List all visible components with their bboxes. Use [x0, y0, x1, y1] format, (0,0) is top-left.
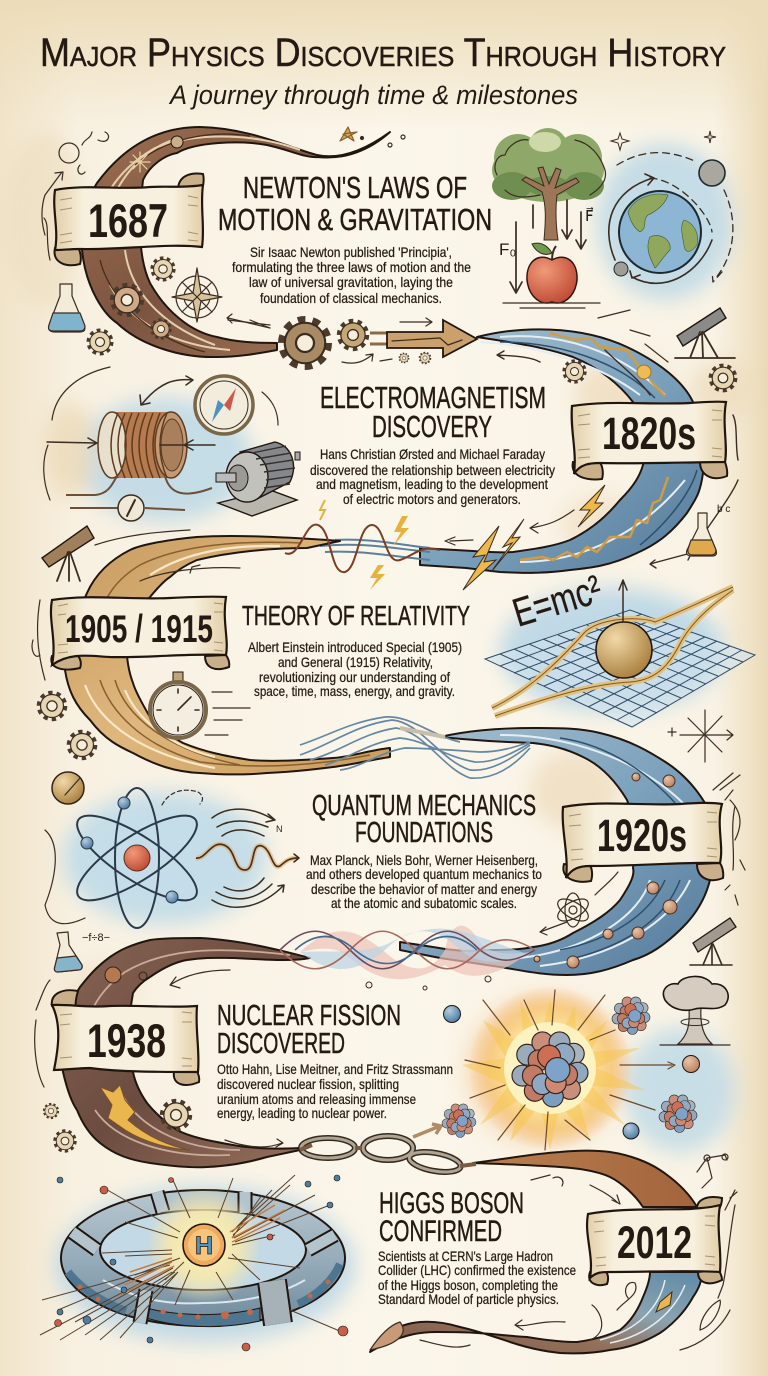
swoosh: 2012 upper copper ribbon — [473, 1150, 697, 1207]
heading: Newton — [218, 170, 492, 237]
icon: gears left of relativity — [32, 600, 95, 758]
text: Fission body: Otto Hahn, Lise Meitner, and Fritz Strassmann — [217, 1061, 453, 1077]
icon: spacetime grid with ball — [485, 580, 755, 727]
icon: chain links — [300, 1124, 476, 1175]
icon: flask lower left — [54, 932, 110, 972]
icon: gears and compass rose, top left — [88, 258, 222, 354]
icon: right side gears and arrows: b c — [717, 504, 730, 515]
icon: small planet — [45, 772, 85, 924]
text: Quantum body — [306, 852, 542, 911]
icon: decorative doodles top left — [42, 127, 405, 328]
icon: copper coil — [44, 367, 215, 521]
text: Fission body: uranium atoms and releasing immense — [217, 1091, 416, 1107]
icon: tree with falling arrows: F₀ — [499, 240, 516, 259]
text: Newton body: law of universal gravitation, laying the — [249, 274, 453, 290]
icon: tree with falling arrows — [492, 128, 606, 293]
text: Relativity body: space, time, mass, energy, and gravity. — [254, 683, 455, 699]
banner: 1820s: 1820s — [602, 408, 696, 459]
icon: electric motor — [216, 442, 300, 516]
icon: telescope upper right — [598, 308, 735, 362]
heading: Fission — [217, 1000, 401, 1060]
text: Fission body — [217, 1061, 453, 1121]
banner: 1938 — [52, 990, 199, 1085]
icon: molecule sketch and ornaments around 2012 — [370, 1154, 737, 1350]
text: Electromagnetism body: Hans Christian Ørsted and Michael Faraday — [320, 446, 545, 462]
icon: red apple — [503, 243, 600, 308]
text: Relativity body — [248, 639, 462, 699]
icon: LHC ring: H — [195, 1232, 213, 1260]
icon: right side gears and arrows — [497, 350, 738, 568]
banner: 2012 — [587, 1197, 722, 1285]
icon: small atom sketch on ribbon — [540, 872, 618, 935]
icon: central gears and arrow — [227, 314, 477, 366]
banner: 1905 / 1915: 1905 / 1915 — [65, 608, 213, 651]
swoosh: 1687 brown ribbon — [80, 127, 390, 357]
text: Fission body: discovered nuclear fission, splitting — [217, 1076, 399, 1092]
heading: Higgs — [379, 1187, 524, 1248]
top parchment shading — [0, 0, 768, 130]
banner: 1920s — [563, 803, 723, 882]
banner: 1687 — [54, 174, 204, 265]
swoosh: 1905 golden ribbon — [64, 536, 390, 774]
icon: mushroom cloud — [660, 976, 730, 1045]
banner: 2012: 2012 — [617, 1217, 692, 1268]
text: Quantum body: and others developed quantum mechanics to — [306, 866, 542, 882]
heading: Higgs: CONFIRMED — [379, 1215, 502, 1248]
banner: 1820s — [572, 402, 727, 479]
icon: flask right — [687, 513, 716, 556]
icon: interference waves — [280, 926, 535, 990]
heading: Fission: NUCLEAR FISSION — [217, 1000, 401, 1032]
icon: atom — [66, 788, 208, 928]
heading: Higgs: HIGGS BOSON — [379, 1187, 524, 1220]
subtitle: A journey through time & milestones — [168, 80, 578, 110]
icon: flask left top — [48, 284, 85, 332]
text: Higgs body: Standard Model of particle physics. — [378, 1291, 559, 1307]
text: Quantum body: at the atomic and subatomic scales. — [331, 895, 517, 911]
text: Relativity body: revolutionizing our understanding of — [259, 669, 450, 685]
icon: E = mc squared: E=mc² — [508, 567, 607, 636]
text: Higgs body: Collider (LHC) confirmed the existence — [378, 1262, 576, 1278]
heading: Fission: DISCOVERED — [217, 1028, 345, 1060]
icon: flask lower left: −f÷8− — [82, 932, 110, 944]
icon: compass — [195, 376, 278, 434]
text: Newton body: formulating the three laws of motion and the — [232, 259, 471, 275]
icon: axes sketch right — [668, 710, 745, 870]
text: Higgs body — [378, 1248, 576, 1307]
banner: 1687: 1687 — [88, 194, 168, 247]
text: Quantum body: Max Planck, Niels Bohr, Werner Heisenberg, — [310, 852, 538, 868]
icon: tree with falling arrows: F⃗ — [585, 206, 594, 225]
swoosh: 1938 brown ribbon — [62, 938, 310, 1167]
heading: Electromagnetism: ELECTROMAGNETISM — [320, 380, 546, 415]
text: Newton body: Sir Isaac Newton published 'Principia', — [250, 244, 452, 260]
text: Relativity body: Albert Einstein introduced Special (1905) — [248, 639, 462, 655]
heading: Newton: NEWTON'S LAWS OF — [243, 170, 467, 205]
text: Higgs body: Scientists at CERN's Large Hadron — [378, 1248, 553, 1264]
icon: stopwatch — [150, 672, 250, 738]
text: Electromagnetism body: of electric motors and generators. — [343, 491, 521, 507]
banner: 1905 / 1915 — [51, 597, 229, 670]
text: Electromagnetism body — [310, 446, 555, 507]
heading: Quantum: QUANTUM MECHANICS — [312, 790, 536, 822]
swoosh: 1820s blue ribbon — [320, 329, 708, 573]
text: Higgs body: of the Higgs boson, completing the — [378, 1277, 558, 1293]
text: Electromagnetism body: and magnetism, leading to the development — [316, 476, 548, 492]
icon: gears near fission — [35, 970, 283, 1151]
icon: quantum wave: N — [276, 824, 282, 834]
text: Newton body: foundation of classical mechanics. — [260, 290, 442, 306]
icon: quantum wave — [162, 790, 299, 907]
text: Fission body: energy, leading to nuclear power. — [217, 1105, 387, 1121]
text: Newton body — [232, 244, 471, 306]
banner: 1938: 1938 — [87, 1014, 166, 1067]
heading: Quantum: FOUNDATIONS — [355, 817, 493, 849]
text: Relativity body: and General (1915) Relativity, — [278, 654, 433, 670]
icon: telescope lower right — [690, 806, 738, 965]
swoosh: 1920s blue ribbon — [300, 717, 715, 975]
swoosh: 2012 lower blue-brown ribbon — [370, 1272, 702, 1353]
banner: 1920s: 1920s — [597, 810, 687, 861]
heading: Newton: MOTION & GRAVITATION — [218, 202, 492, 237]
heading: Electromagnetism: DISCOVERY — [372, 409, 492, 444]
icon: LHC ring — [40, 1175, 348, 1351]
text: Electromagnetism body: discovered the relationship between electricity — [310, 462, 555, 478]
heading: Quantum — [312, 790, 536, 849]
icon: sine wave and lightning — [285, 485, 605, 590]
icon: nuclear burst with nucleus — [442, 976, 700, 1150]
icon: earth, moon and orbit — [609, 131, 733, 283]
text: Quantum body: describe the behavior of matter and energy — [311, 881, 537, 897]
heading: Relativity: THEORY OF RELATIVITY — [242, 600, 470, 631]
icon: telescope left — [42, 526, 240, 581]
heading: Electromagnetism — [320, 380, 546, 444]
